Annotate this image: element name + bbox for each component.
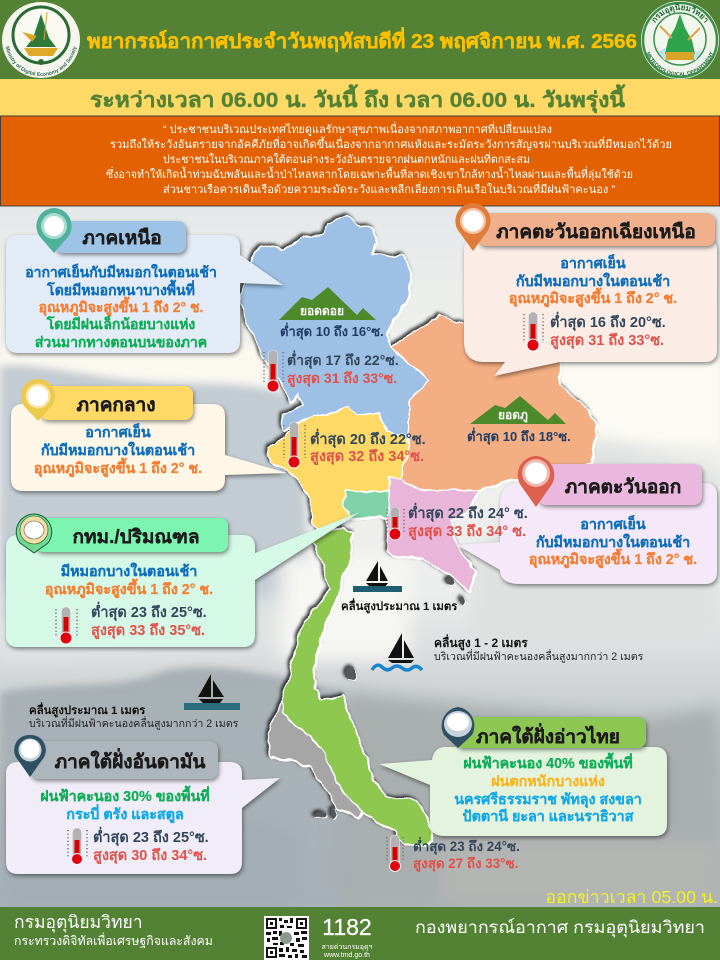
- advisory panel: ประชาชนในบริเวณภาคใต้ตอนล่างระวังอันตรายจากฝนตกหนักและฝนที่ตกสะสม: [163, 151, 530, 166]
- temperatures: [91, 601, 207, 639]
- advisory panel: ซึ่งอาจทำให้เกิดน้ำท่วมฉับพลันและน้ำป่าไหลหลากโดยเฉพาะพื้นที่ลาดเชิงเขาใกล้ทางน้ำไหลผ่านและพื้นที่ลุ่มใช้ด้วย: [106, 166, 633, 181]
- forecast text: กับมีหมอกบางในตอนเช้า: [536, 533, 690, 551]
- temperatures: north: [287, 350, 399, 387]
- heading: ภาคใต้ฝั่งอ่าวไทย: [476, 723, 620, 748]
- temperatures: east: สูงสุด 33 ถึง 34° ซ.: [408, 523, 526, 540]
- icon: location pin: [16, 514, 52, 553]
- logo: Meteorological Department: [641, 1, 719, 79]
- icon: location pin: [518, 456, 554, 507]
- icon: qr code: [264, 916, 309, 960]
- temperatures: [93, 826, 209, 864]
- advisory panel: รวมถึงให้ระวังอันตรายจากอัคคีภัยที่อาจเกิดขึ้นเนื่องจากอากาศแห้งและระมัดระวังการสัญจรผ่านบริเวณที่มีหมอกไว้ด้วย: [110, 136, 672, 151]
- islands: [313, 578, 466, 819]
- forecast text: นครศรีธรรมราช พัทลุง สงขลา: [454, 791, 642, 808]
- heading: ภาคเหนือ: [82, 227, 162, 249]
- wave text: andaman: [29, 702, 239, 730]
- heading: ภาคใต้ฝั่งอันดามัน: [55, 748, 205, 773]
- forecast text: โดยมีฝนเล็กน้อยบางแห่ง: [46, 315, 195, 332]
- callout bubble: [379, 747, 667, 836]
- temperatures: east: [408, 502, 528, 540]
- panel: south gulf coast: [379, 707, 667, 836]
- forecast text: ฝนตกหนักบางแห่ง: [491, 774, 605, 790]
- heading bar: [55, 221, 186, 253]
- icon: location pin: [21, 379, 55, 421]
- temperatures: [550, 311, 666, 349]
- forecast text: ปัตตานี ยะลา และนราธิวาส: [463, 808, 634, 825]
- wave text: lower gulf: บริเวณที่มีฝนฟ้าคะนองคลื่นสูงมากกว่า 2 เมตร: [434, 649, 644, 663]
- issue time: ออกข่าวเวลา 05.00 น.: [545, 887, 718, 907]
- heading bar: [30, 741, 218, 779]
- region: central: [267, 407, 410, 530]
- icon: location pin: [455, 203, 491, 251]
- advisory panel: [0, 116, 720, 206]
- mountain: ยอดภู: ยอดภู: [498, 408, 528, 423]
- heading: ภาคตะวันออก: [565, 477, 681, 498]
- thermometer: north: [264, 350, 283, 392]
- wave text: andaman: บริเวณที่มีฝนฟ้าคะนองคลื่นสูงมากกว่า 2 เมตร: [29, 716, 239, 730]
- region: east: [388, 478, 478, 590]
- forecast text: ฝนฟ้าคะนอง 40% ของพื้นที่: [463, 752, 633, 772]
- forecast text: อุณหภูมิจะสูงขึ้น 1 ถึง 2° ช.: [45, 578, 213, 598]
- temperatures: ต่ำสุด 23 ถึง 25°ซ.: [91, 601, 207, 621]
- temperatures: สูงสุด 33 ถึง 35°ซ.: [91, 622, 205, 639]
- forecast text: [454, 752, 642, 825]
- icon: location pin: [442, 707, 474, 748]
- region: north: [240, 217, 428, 445]
- region: south gulf: [282, 528, 433, 847]
- heading: กทม./ปริมณฑล: [73, 527, 199, 548]
- forecast text: กับมีหมอกบางในตอนเช้า: [516, 272, 670, 290]
- forecast text: อากาศเย็น: [580, 514, 646, 533]
- temperatures: สูงสุด 30 ถึง 34°ซ.: [93, 847, 207, 864]
- footer: hotline: www.tmd.go.th: [323, 952, 370, 959]
- low temperature: doi peaks: ต่ำสุด 10 ถึง 16°ซ.: [280, 322, 384, 340]
- region: northeast: [390, 315, 597, 490]
- heading bar: [538, 464, 702, 505]
- forecast text: [40, 785, 210, 823]
- heading: ภาคตะวันออกเฉียงเหนือ: [496, 221, 696, 243]
- title: พยากรณ์อากาศประจำวันพฤหัสบดีที่ 23 พฤศจิกายน พ.ศ. 2566: [87, 26, 637, 53]
- temperatures: สูงสุด 31 ถึง 33°ซ.: [550, 332, 664, 349]
- advisory panel: “ ประชาชนบริเวณประเทศไทยดูแลรักษาสุขภาพเนื่องจากสภาพอากาศที่เปลี่ยนแปลง: [163, 121, 552, 136]
- forecast text: อุณหภูมิจะสูงขึ้น 1 ถึง 2° ช.: [34, 457, 202, 477]
- mountain: ยอดภู: [470, 396, 566, 424]
- temperatures: north: ต่ำสุด 17 ถึง 22°ซ.: [287, 350, 399, 369]
- temperatures: east: ต่ำสุด 22 ถึง 24° ซ.: [408, 502, 528, 522]
- header bar: [0, 0, 720, 79]
- footer bar: [0, 907, 720, 960]
- thermometer: south gulf: [387, 835, 403, 872]
- heading bar: [455, 717, 646, 748]
- forecast text: อุณหภูมิจะสูงขึ้น 1 ถึง 2° ช.: [39, 296, 203, 316]
- mountain: ยอดดอย: [279, 287, 376, 320]
- map of Thailand: [240, 217, 597, 847]
- forecast text: โดยมีหมอกหนาบางพื้นที่: [46, 279, 195, 298]
- low temperature: phu peaks: ต่ำสุด 10 ถึง 18°ซ.: [467, 427, 571, 445]
- wave text: lower gulf: [434, 634, 644, 663]
- thermometer: east: [387, 507, 404, 540]
- forecast text: [509, 253, 677, 307]
- logo: Meteorological Department: กรมอุตุนิยมวิทยา: [652, 4, 708, 23]
- temperatures: ต่ำสุด 16 ถึง 20°ซ.: [550, 311, 666, 331]
- thermometer: central: [284, 422, 305, 468]
- footer: hotline: [322, 914, 372, 959]
- panel: east: [457, 456, 717, 584]
- thermometer: [68, 828, 87, 864]
- forecast text: กับมีหมอกบางในตอนเช้า: [41, 441, 195, 459]
- wave text: andaman: คลื่นสูงประมาณ 1 เมตร: [29, 702, 146, 718]
- icon: sailboat gulf upper: [353, 561, 402, 592]
- footer: department name: กระทรวงดิจิทัลเพื่อเศรษฐกิจและสังคม: [14, 932, 213, 948]
- wave text: upper gulf: คลื่นสูงประมาณ 1 เมตร: [341, 598, 458, 614]
- icon: location pin: [36, 208, 72, 253]
- forecast text: อุณหภูมิจะสูงขึ้น 1 ถึง 2° ช.: [509, 287, 677, 307]
- temperatures: south gulf: ต่ำสุด 23 ถึง 24°ซ.: [413, 836, 520, 855]
- temperatures: north: สูงสุด 31 ถึง 33°ซ.: [287, 370, 397, 387]
- panel: north: [6, 208, 283, 353]
- forecast text: [45, 562, 213, 598]
- logo: Ministry of Digital Economy and Society: [2, 2, 80, 78]
- background: misty mountains: [0, 206, 720, 907]
- footer: forecast bureau: กองพยากรณ์อากาศ กรมอุตุนิยมวิทยา: [415, 918, 705, 938]
- thermometer: [56, 607, 77, 644]
- time period band: [0, 79, 720, 116]
- icon: sailboat andaman: [184, 674, 240, 710]
- mountain: ยอดดอย: ยอดดอย: [300, 304, 344, 318]
- forecast text: อากาศเย็นกับมีหมอกในตอนเช้า: [25, 263, 217, 280]
- callout bubble: [457, 483, 717, 584]
- forecast text: กระบี่ ตรัง และสตูล: [66, 803, 184, 823]
- heading: ภาคกลาง: [76, 395, 156, 416]
- wave text: lower gulf: คลื่นสูง 1 - 2 เมตร: [434, 634, 528, 651]
- forecast text: ส่วนมากทางตอนบนของภาค: [35, 334, 207, 350]
- panel: northeast: [455, 203, 717, 376]
- forecast text: ฝนฟ้าคะนอง 30% ของพื้นที่: [40, 785, 210, 805]
- forecast text: อากาศเย็น: [85, 422, 151, 441]
- thermometer: [524, 312, 543, 351]
- logo: Ministry of Digital Economy and Society: Ministry of Digital Economy and Society: [6, 46, 77, 76]
- temperatures: ต่ำสุด 23 ถึง 25°ซ.: [93, 826, 209, 846]
- forecast text: อุณหภูมิจะสูงขึ้น 1 ถึง 2° ช.: [529, 548, 697, 568]
- callout bubble: [464, 238, 717, 376]
- icon: location pin: [14, 735, 46, 777]
- footer: department name: [14, 912, 213, 948]
- logo: Meteorological Department: METEOROLOGICAL DEPARTMENT: [646, 52, 713, 76]
- forecast text: มีหมอกบางในตอนเช้า: [61, 562, 197, 580]
- forecast text: [529, 514, 697, 568]
- callout bubble: [6, 235, 283, 353]
- footer: hotline: 1182: [322, 914, 372, 940]
- panel: central: [11, 379, 287, 491]
- advisory panel: ส่วนชาวเรือควรเดินเรือด้วยความระมัดระวังและหลีกเลี่ยงการเดินเรือในบริเวณที่มีฝนฟ้าคะนอง ”: [163, 181, 615, 196]
- time period band: ระหว่างเวลา 06.00 น. วันนี้ ถึง เวลา 06.00 น. วันพรุ่งนี้: [90, 84, 626, 114]
- panel: south andaman coast: [6, 735, 280, 874]
- heading bar: [35, 518, 228, 552]
- heading bar: [40, 386, 193, 420]
- callout bubble: [6, 762, 280, 874]
- temperatures: central: [310, 428, 426, 465]
- heading bar: [478, 213, 715, 246]
- forecast text: [25, 263, 217, 350]
- callout bubble: [6, 512, 360, 647]
- temperatures: south gulf: [413, 836, 520, 872]
- panel: bangkok and vicinity: [6, 512, 360, 647]
- region: bangkok metropolitan: [343, 490, 390, 517]
- temperatures: central: ต่ำสุด 20 ถึง 22°ซ.: [310, 428, 426, 448]
- temperatures: central: สูงสุด 32 ถึง 34°ซ.: [310, 448, 424, 465]
- temperatures: south gulf: สูงสุด 27 ถึง 33°ซ.: [413, 856, 518, 872]
- region: south andaman: [268, 700, 363, 817]
- icon: sailboat gulf lower: [372, 633, 422, 670]
- forecast text: อากาศเย็น: [560, 253, 626, 272]
- callout bubble: [11, 404, 287, 491]
- forecast text: [34, 422, 202, 477]
- footer: department name: กรมอุตุนิยมวิทยา: [14, 912, 143, 933]
- footer: hotline: สายด่วนกรมอุตุฯ: [322, 944, 372, 951]
